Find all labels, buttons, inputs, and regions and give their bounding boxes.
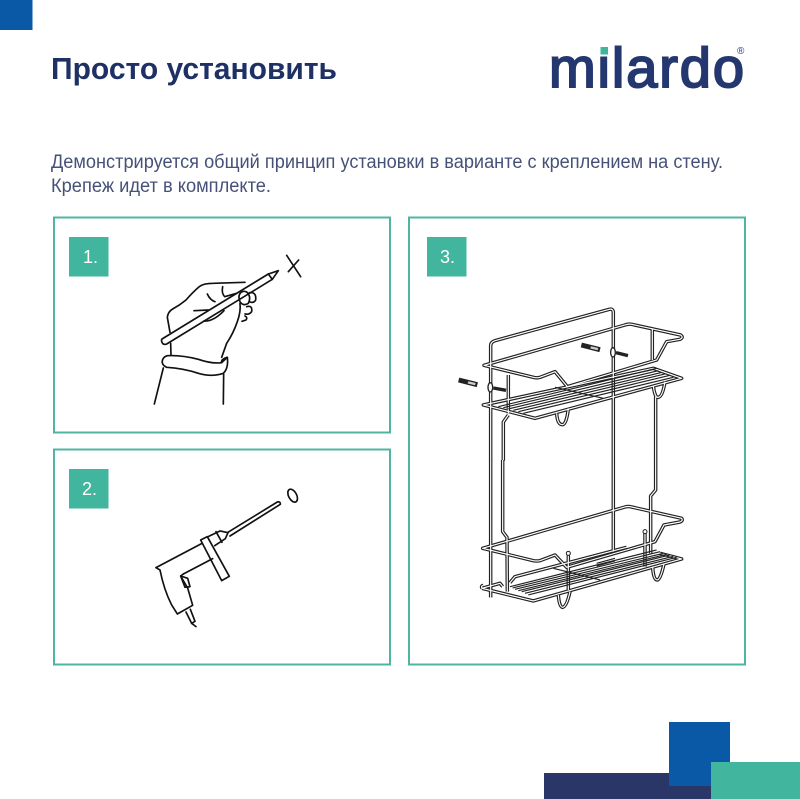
icon: hand with pencil marking X [154,255,301,404]
title: Просто установить [51,52,337,86]
panel: step 2 [54,450,390,664]
wall anchors and screws [459,345,628,392]
description text: Крепеж идет в комплекте. [51,176,271,197]
panel: step 3 [409,218,745,664]
lower shelf [482,460,682,607]
icon: drill with hole mark [156,488,299,627]
step 2 number badge: 2. [82,479,97,499]
step 2 number badge [69,469,108,508]
panel: step 1 [54,218,390,432]
illustration: wall-mounted two-tier wire rack [459,309,682,607]
step 3 number badge: 3. [440,247,455,267]
step 1 number badge: 1. [83,247,98,267]
footer colour blocks [544,722,800,799]
upper shelf [459,309,682,461]
corner accent square [0,0,32,30]
step 1 number badge [69,237,108,276]
description text: Демонстрируется общий принцип установки в варианте с креплением на стену. [51,152,723,173]
step 3 number badge [427,237,466,276]
logo: milardo: ® [737,46,745,57]
logo: milardo: milardo [549,36,744,99]
